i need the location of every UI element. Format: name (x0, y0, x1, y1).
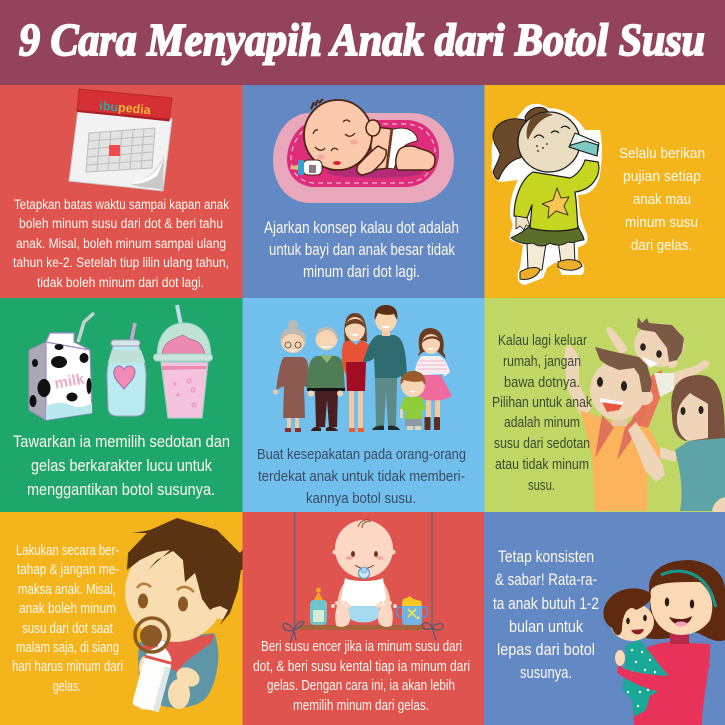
text block: terdekat anak untuk tidak memberi- (258, 469, 465, 485)
logo: ibupedia: ibupedia (99, 99, 152, 117)
panel: bottles are for babies (242, 85, 484, 298)
icon: sippy cup (396, 596, 428, 625)
text block: Tawarkan ia memilih sedotan dan (13, 433, 230, 451)
text block: anak boleh minum (19, 600, 116, 617)
text block: anak mau (633, 191, 691, 208)
panel: be consistent and patient (484, 512, 725, 725)
text block: tahap & jangan me- (17, 561, 119, 578)
text block: rumah, jangan (503, 354, 581, 370)
panel: praise the child (484, 85, 725, 298)
text block: Tetapkan batas waktu sampai kapan anak (14, 197, 229, 212)
icon: baby bottle (310, 588, 327, 625)
label: milk: milk (53, 370, 86, 393)
text block: anak. Misal, boleh minum sampai ulang (16, 236, 226, 251)
text block: dari gelas. (631, 237, 692, 254)
text block: Tetap konsisten (498, 548, 594, 566)
pacifier (135, 618, 169, 652)
little boy (400, 371, 426, 430)
illustration: baby on a swing (283, 512, 443, 643)
text block (12, 542, 123, 695)
text block: lepas dari botol (497, 641, 595, 659)
text block: susunya. (520, 664, 572, 682)
text block: boleh minum susu dari dot & beri tahu (19, 216, 223, 231)
text block: atau tidak minum (495, 457, 589, 473)
text block: pujian setiap (623, 168, 701, 185)
text block: & sabar! Rata-ra- (495, 571, 597, 589)
father (363, 305, 407, 430)
panel: fun straws and cups (0, 298, 242, 512)
illustration: family of six (273, 305, 452, 432)
text block: bawa dotnya. (504, 375, 580, 391)
child (603, 588, 668, 717)
text block: Kalau lagi keluar (498, 333, 587, 349)
text block: gelas. Dengan cara ini, ia akan lebih (267, 677, 455, 694)
illustration: mother hugging child (603, 560, 725, 725)
text block: Selalu berikan (619, 145, 705, 162)
panel: set a time limit (0, 85, 242, 298)
icon: calendar (69, 89, 172, 191)
text block: kannya botol susu. (306, 491, 416, 507)
text block: ta anak butuh 1-2 (493, 595, 599, 613)
text block: susu. (528, 478, 555, 494)
illustration: heart bottle (107, 323, 146, 416)
text block: hari harus minum dari (12, 658, 123, 675)
text block: Ajarkan konsep kalau dot adalah (264, 219, 459, 237)
illustration: smoothie cup (154, 305, 212, 418)
mother (660, 375, 725, 516)
mother (626, 560, 725, 725)
text block: Lakukan secara ber- (16, 542, 119, 559)
text block: gelas berkarakter lucu untuk (31, 457, 213, 475)
text block: Buat kesepakatan pada orang-orang (257, 447, 466, 463)
mother's hand (615, 650, 625, 666)
text block: maksa anak. Misal, (18, 581, 116, 598)
illustration: milk carton (29, 313, 94, 420)
text block (13, 197, 229, 290)
panel: gradual weaning (0, 512, 249, 725)
illustration: sleeping baby on mat (273, 99, 454, 203)
text block: dot, & beri susu kental tiap ia minum dari (253, 658, 470, 675)
text block (13, 433, 230, 499)
father (565, 345, 665, 511)
text block: minum dari dot lagi. (303, 263, 420, 281)
text block: untuk bayi dan anak besar tidak (269, 241, 456, 259)
panel: agreement with relatives (242, 298, 484, 512)
title banner (0, 0, 725, 85)
text block (619, 145, 705, 254)
child on shoulders (607, 317, 710, 428)
text block: gelas. (53, 678, 81, 695)
text block: menggantikan botol susunya. (27, 481, 215, 499)
text block: Pilihan untuk anak (492, 395, 593, 411)
text block: malam saja, di siang (16, 639, 119, 656)
text block: minum susu (625, 214, 698, 231)
grandfather (307, 327, 345, 431)
panel: do not bring the bottle outside (484, 298, 725, 516)
text block: memilih minum dari gelas. (293, 697, 429, 714)
mother's arm (617, 655, 710, 693)
text block (493, 548, 599, 682)
text block (264, 219, 459, 281)
text block (253, 638, 470, 714)
text block (492, 333, 593, 494)
text block: adalah minum (504, 415, 580, 431)
panel: thin and thick milk (242, 512, 484, 725)
text block: bulan untuk (509, 618, 584, 636)
text block: tahun ke-2. Setelah tiup lilin ulang tahun, (13, 255, 229, 270)
teen daughter (415, 328, 452, 430)
text block: Beri susu encer jika ia minum susu dari (261, 638, 462, 655)
text block: tidak boleh minum dari dot lagi. (37, 275, 204, 290)
text block: susu dari dot saat (22, 620, 114, 637)
illustration: girl drinking from a glass (492, 104, 602, 285)
text block (257, 447, 466, 507)
mother (342, 313, 372, 432)
illustration: parents with child on shoulders (565, 317, 725, 516)
illustration: boy with pacifier and bottle (125, 518, 249, 712)
text block: susu dari sedotan (494, 436, 590, 452)
grandmother (273, 320, 308, 432)
